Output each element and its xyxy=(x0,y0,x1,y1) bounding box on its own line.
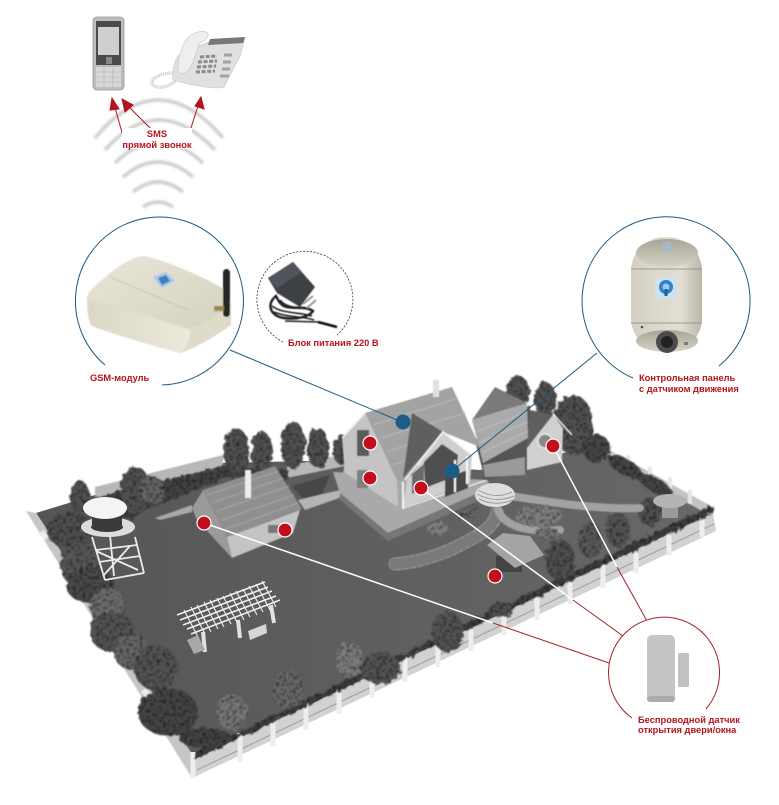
label: SMS / direct call: SMS xyxy=(147,129,167,139)
water tower xyxy=(81,497,144,580)
pergola xyxy=(177,581,280,654)
label: control panel xyxy=(639,373,739,394)
label: GSM module: GSM-модуль xyxy=(90,373,150,383)
connector: terrace sensor xyxy=(421,488,573,600)
markers: GSM module and control panel xyxy=(396,414,460,478)
flower beds xyxy=(427,502,563,539)
device: power adapter xyxy=(268,262,337,327)
device: GSM module body xyxy=(87,256,231,353)
callout: GSM module xyxy=(75,217,243,385)
label: power supply: Блок питания 220 В xyxy=(288,338,379,348)
arrow: SMS to mobile phone xyxy=(122,99,155,133)
bushes along left and front sides xyxy=(46,498,713,760)
arrow: to desk telephone xyxy=(188,97,204,137)
markers: door and window sensors xyxy=(197,436,560,583)
arrow: to mobile phone xyxy=(110,98,123,136)
label: wireless sensor: открытия двери/окна xyxy=(638,725,737,735)
icon: desk telephone xyxy=(152,32,245,88)
back fence xyxy=(95,441,713,517)
label: SMS / direct call xyxy=(122,128,192,150)
connector: wing sensor outside the plot xyxy=(617,567,647,621)
label: control panel: Контрольная панель xyxy=(639,373,736,383)
wireless signal arcs xyxy=(95,100,223,207)
yard lawn xyxy=(36,447,713,762)
icon: mobile phone xyxy=(93,17,124,90)
fence: left side xyxy=(26,511,196,778)
small gazebo on right xyxy=(653,494,687,518)
main roof xyxy=(365,387,480,480)
gazebo xyxy=(487,533,544,572)
label: SMS / direct call: прямой звонок xyxy=(122,140,192,150)
terrace xyxy=(333,472,492,541)
connector: GSM module to roof xyxy=(230,350,402,422)
stone path xyxy=(395,496,640,564)
house plot illustration xyxy=(26,376,716,778)
connector: outbuilding sensor outside the plot xyxy=(493,623,609,663)
callout: control panel xyxy=(582,217,750,394)
callout: wireless door and window sensor xyxy=(609,617,740,735)
left and front walls xyxy=(342,413,398,507)
connector: wing sensor xyxy=(553,446,617,567)
main house xyxy=(342,380,572,509)
right wing xyxy=(475,405,530,480)
connector: outbuilding sensor xyxy=(204,523,493,623)
device: control panel with motion sensor xyxy=(631,237,702,353)
callout: power supply xyxy=(257,251,379,348)
fence: front side xyxy=(192,513,716,778)
round staircase xyxy=(475,483,515,507)
label: wireless sensor: Беспроводной датчик xyxy=(638,715,740,725)
outbuilding xyxy=(155,462,372,558)
device: contact sensor xyxy=(647,635,689,702)
label: control panel: с датчиком движения xyxy=(639,384,739,394)
trees and hedges behind the plot xyxy=(70,376,676,530)
label: wireless sensor xyxy=(638,715,740,735)
connector: terrace sensor outside the plot xyxy=(573,600,623,636)
connector: control panel to house xyxy=(452,353,597,471)
